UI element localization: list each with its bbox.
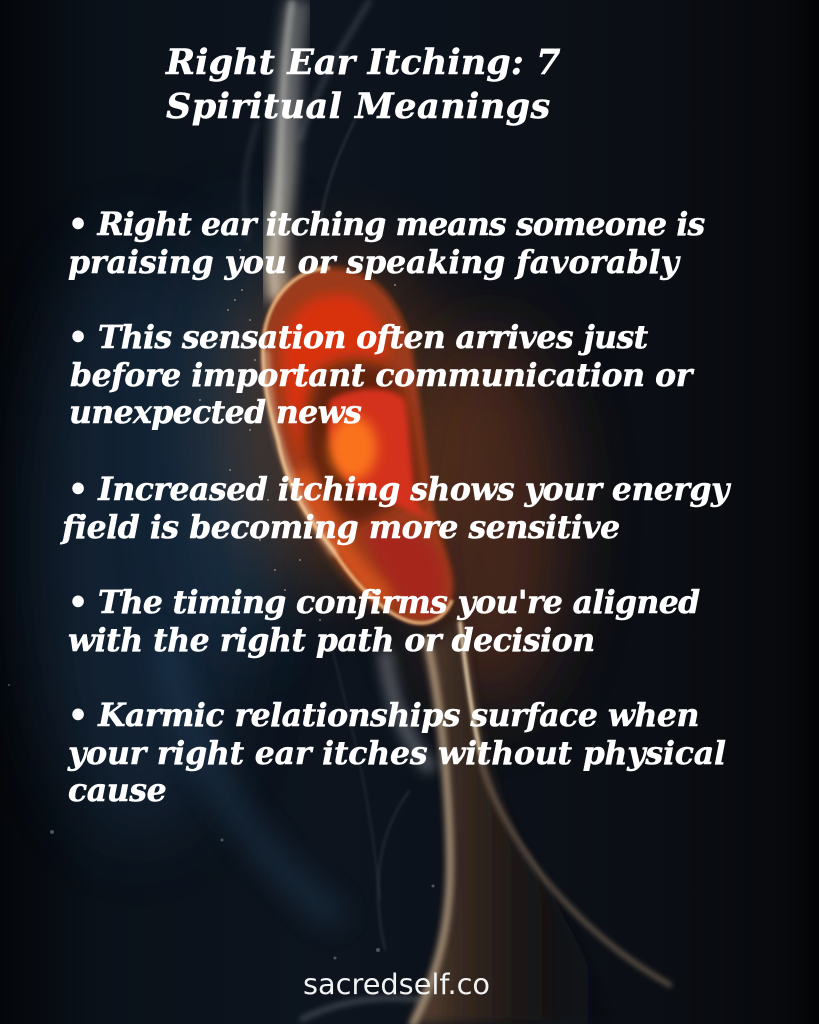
bullet: sensation: unexpected news [69, 394, 361, 431]
neck lines [413, 623, 670, 1024]
grey wisps under ear [300, 640, 432, 1020]
bullet: karmic: your right ear itches without physical [68, 735, 726, 772]
blue glow left [30, 240, 250, 840]
title [164, 42, 561, 127]
bullet: praising: • Right ear itching means someone is [68, 206, 704, 243]
title: Spiritual Meanings [166, 86, 551, 127]
bullet: energy field: field is becoming more sensitive [62, 509, 620, 546]
ear: dark inner fold [308, 364, 425, 525]
ear: helix red [282, 294, 386, 470]
ear: lower lobe [365, 526, 446, 616]
bullet: praising: praising you or speaking favorably [68, 244, 679, 281]
bullet: karmic: • Karmic relationships surface when [68, 697, 699, 734]
title: Right Ear Itching: 7 [166, 42, 561, 83]
bullet: timing: • The timing confirms you're aligned [68, 584, 700, 621]
footer: site name: sacredself.co [303, 967, 490, 1001]
bullet: energy field [60, 471, 732, 546]
bullet: karmic: cause [68, 772, 166, 809]
bullet: timing [68, 584, 700, 659]
sparkles [199, 249, 396, 621]
brown glow right of the ear [415, 330, 565, 710]
bullet: energy field: • Increased itching shows your energy [68, 471, 729, 508]
bullet: praising [68, 206, 705, 281]
ear: rim highlight [263, 268, 452, 623]
ear: concha [328, 389, 438, 522]
bullet: sensation: before important communication or [70, 357, 692, 394]
bullet: timing: with the right path or decision [68, 622, 595, 659]
bullet: sensation [68, 319, 694, 431]
neck fill [413, 623, 620, 1024]
bullet: sensation: • This sensation often arrives just [68, 319, 648, 356]
bullet: karmic [67, 697, 726, 809]
ear [263, 267, 453, 623]
hair strands [244, 0, 370, 300]
